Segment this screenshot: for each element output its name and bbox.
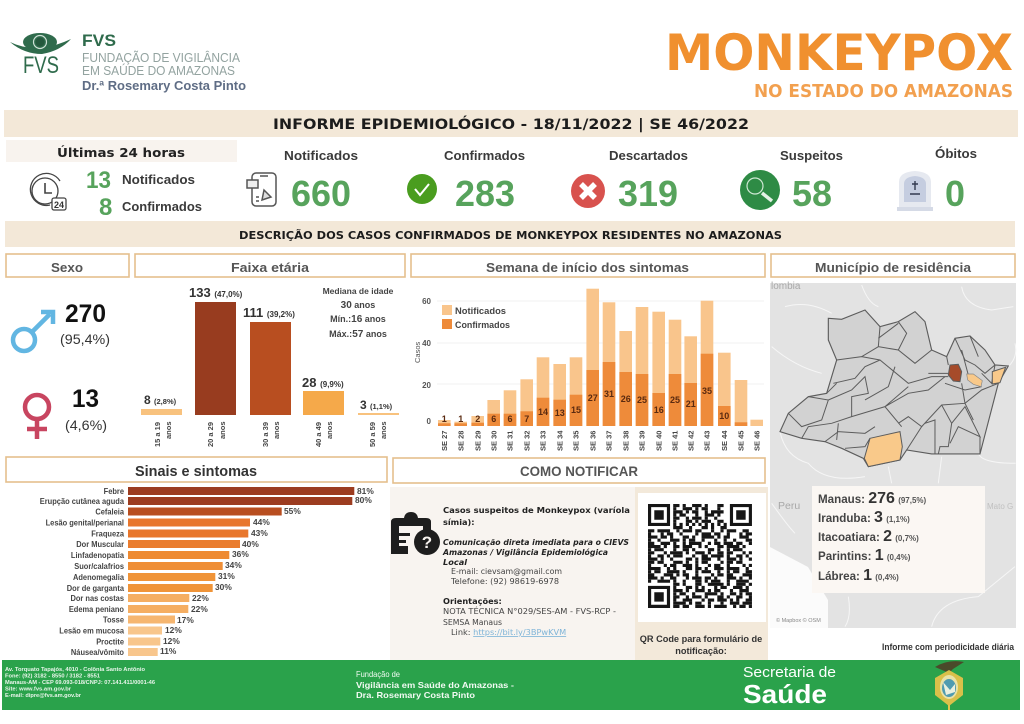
y axis: 60 bbox=[422, 297, 432, 306]
value labels: 13 bbox=[555, 408, 565, 418]
x axis labels: SE 36 bbox=[588, 431, 597, 451]
heading band: informe bbox=[4, 110, 1018, 137]
value labels: 25 bbox=[637, 395, 647, 405]
caption: QR: notificação: bbox=[675, 646, 727, 656]
panel header: faixa etária bbox=[135, 254, 405, 277]
text block: mediana de idade: Máx.:57 anos bbox=[329, 329, 387, 340]
footer: address bbox=[5, 667, 155, 699]
value labels: 15 bbox=[571, 405, 581, 415]
symptom values: 31% bbox=[218, 571, 235, 581]
icon: tombstone bbox=[897, 171, 933, 211]
text: casos suspeitos: Local bbox=[443, 557, 467, 567]
symptom values: 30% bbox=[215, 582, 232, 592]
symptom labels bbox=[40, 487, 125, 657]
x axis labels: SE 30 bbox=[489, 431, 498, 451]
panel: últimas 24 horas bbox=[6, 140, 237, 221]
text: casos suspeitos: Orientações: bbox=[443, 596, 502, 606]
legend: Confirmados bbox=[455, 320, 510, 331]
icon: clipboard with question bbox=[391, 512, 440, 555]
panel header: município: Município de residência bbox=[815, 260, 972, 275]
panel header: semana: Semana de início dos sintomas bbox=[486, 260, 689, 275]
title: NO ESTADO DO AMAZONAS bbox=[754, 81, 1013, 102]
bar chart: faixa etária: 8 (2,8%) bbox=[144, 393, 177, 407]
QR code bbox=[648, 504, 752, 608]
symptom values: 43% bbox=[251, 528, 268, 538]
value labels bbox=[442, 386, 729, 424]
value labels: 2 bbox=[475, 414, 480, 424]
bar chart: faixa etária: 40 a 49 bbox=[314, 422, 323, 447]
callout: municípios: Lábrea: 1 (0,4%) bbox=[818, 567, 899, 584]
bar chart: faixa etária: 50 a 59 bbox=[368, 422, 377, 447]
kpi: suspeitos bbox=[740, 149, 843, 214]
footer: secretaria de saúde bbox=[743, 664, 836, 709]
kpi: notificados: Notificados bbox=[284, 149, 358, 163]
value labels: 16 bbox=[654, 405, 664, 415]
callout: municípios: Parintins: 1 (0,4%) bbox=[818, 547, 911, 564]
x axis labels: SE 33 bbox=[539, 431, 548, 451]
x axis labels: SE 35 bbox=[572, 431, 581, 451]
y axis bbox=[413, 297, 432, 426]
panel: como notificar bbox=[390, 487, 635, 660]
panel: sexo: (4,6%) bbox=[65, 417, 107, 433]
value labels: 14 bbox=[538, 407, 548, 417]
x axis labels: SE 32 bbox=[522, 431, 531, 451]
value labels: 7 bbox=[524, 414, 529, 424]
bar chart: faixa etária: anos bbox=[272, 421, 281, 439]
value labels: 21 bbox=[686, 399, 696, 409]
text: casos suspeitos: Amazonas / Vigilância Epidemiológica bbox=[442, 547, 608, 557]
legend bbox=[442, 305, 510, 331]
text block: mediana de idade: Mín.:16 anos bbox=[330, 314, 386, 325]
symptom values: 11% bbox=[160, 646, 177, 656]
symptom labels: Erupção cutânea aguda bbox=[40, 497, 125, 506]
x axis labels: SE 28 bbox=[456, 431, 465, 451]
x axis labels: SE 46 bbox=[752, 431, 761, 451]
kpi: suspeitos: 58 bbox=[792, 173, 832, 214]
footer: fundação: Vigilância em Saúde do Amazonas - bbox=[356, 680, 514, 690]
kpi: óbitos: Óbitos bbox=[935, 146, 977, 161]
caption: QR bbox=[640, 634, 762, 656]
footer: address: E-mail: dipre@fvs.am.gov.br bbox=[5, 693, 82, 699]
icon: female bbox=[25, 395, 49, 439]
map labels: © Mapbox © OSM bbox=[776, 617, 821, 624]
kpi: confirmados bbox=[407, 149, 525, 214]
chart: semana de início dos sintomas bbox=[413, 289, 764, 451]
value labels: 6 bbox=[507, 414, 513, 424]
panel header: município bbox=[771, 254, 1015, 277]
panel: sexo: (95,4%) bbox=[60, 331, 110, 347]
kpi: notificados: 660 bbox=[291, 173, 351, 214]
logo: FVS: FVS bbox=[82, 31, 116, 50]
value labels: 10 bbox=[719, 411, 729, 421]
kpi: confirmados: 283 bbox=[455, 173, 515, 214]
x axis labels: SE 29 bbox=[473, 431, 482, 451]
symptom labels: Dor nas costas bbox=[70, 594, 125, 603]
text: casos suspeitos: E-mail: cievsam@gmail.com bbox=[451, 566, 562, 576]
text: casos suspeitos: Link: https://bit.ly/3BPwKVM bbox=[451, 627, 566, 637]
map labels: lombia bbox=[771, 281, 801, 292]
icon: cross bbox=[571, 174, 605, 208]
symptom labels: Cefaleia bbox=[95, 507, 125, 517]
symptom labels: Náusea/vômito bbox=[71, 648, 124, 657]
symptom values: 12% bbox=[163, 636, 180, 646]
kpi: descartados: Descartados bbox=[609, 149, 688, 163]
x axis labels: SE 44 bbox=[720, 430, 729, 451]
panel: últimas 24 horas: 13 bbox=[86, 167, 111, 194]
text block: mediana de idade bbox=[323, 286, 394, 340]
symptom labels: Adenomegalia bbox=[73, 573, 125, 582]
panel header: como notificar bbox=[393, 458, 765, 483]
kpi: suspeitos: Suspeitos bbox=[780, 149, 843, 163]
x axis labels: SE 38 bbox=[621, 431, 630, 451]
panel header: sexo: Sexo bbox=[51, 260, 83, 275]
bar chart: faixa etária: 3 (1,1%) bbox=[360, 398, 393, 412]
symptom values bbox=[160, 486, 374, 656]
value labels: 1 bbox=[442, 414, 447, 424]
bars: notificados bbox=[438, 289, 763, 426]
bar chart: faixa etária bbox=[141, 285, 399, 447]
callout: municípios bbox=[812, 486, 985, 593]
state of Amazonas bbox=[780, 310, 1008, 467]
bar chart: faixa etária: anos bbox=[379, 421, 388, 439]
y axis: 20 bbox=[422, 381, 432, 390]
value labels: 27 bbox=[588, 393, 598, 403]
panel header: sinais e sintomas bbox=[6, 457, 387, 482]
bar chart: faixa etária: 20 a 29 bbox=[206, 422, 215, 447]
symptom labels: Dor Muscular bbox=[76, 540, 124, 549]
background rivers bbox=[772, 285, 1016, 627]
bar chart: faixa etária: 28 (9,9%) bbox=[302, 375, 344, 390]
bar chart: faixa etária: 30 a 39 bbox=[261, 422, 270, 447]
heading band: informe: INFORME EPIDEMIOLÓGICO - 18/11/2022 | SE 46/2022 bbox=[273, 115, 749, 133]
panel header: semana bbox=[411, 254, 765, 277]
kpi: confirmados: Confirmados bbox=[444, 149, 525, 163]
value labels: 25 bbox=[670, 395, 680, 405]
map labels: Mato G bbox=[987, 502, 1013, 511]
symptom labels: Linfadenopatia bbox=[71, 551, 125, 560]
bar chart: faixa etária: 111 (39,2%) bbox=[243, 305, 295, 320]
x axis labels: SE 40 bbox=[654, 431, 663, 451]
footer: fundação: Dra. Rosemary Costa Pinto bbox=[356, 690, 475, 700]
footer: fundação: Fundação de bbox=[356, 669, 400, 679]
symptom values: 22% bbox=[191, 604, 208, 614]
logo: FVS: FVS bbox=[23, 52, 59, 79]
logo: FVS: Dr.ª Rosemary Costa Pinto bbox=[82, 79, 246, 93]
legend: Notificados bbox=[455, 306, 506, 317]
text: casos suspeitos: Casos suspeitos de Monkeypox (varíola bbox=[443, 505, 630, 515]
symptom values: 36% bbox=[232, 549, 249, 559]
value labels: 26 bbox=[621, 394, 631, 404]
map: município de residência bbox=[770, 281, 1016, 628]
symptom values: 22% bbox=[192, 593, 209, 603]
value labels: 35 bbox=[702, 386, 712, 396]
symptom values: 17% bbox=[177, 615, 194, 625]
symptom values: 34% bbox=[225, 560, 242, 570]
value labels: 1 bbox=[458, 414, 463, 424]
symptom values: 12% bbox=[165, 625, 182, 635]
panel: QR code bbox=[635, 487, 768, 660]
icon: clipboard with question: ? bbox=[422, 533, 432, 552]
y axis: 40 bbox=[422, 339, 432, 348]
kpi: óbitos bbox=[897, 146, 977, 214]
heading band: descrição: DESCRIÇÃO DOS CASOS CONFIRMADOS DE MONKEYPOX RESIDENTES NO AMAZONAS bbox=[239, 229, 782, 242]
municipal borders bbox=[788, 322, 998, 454]
text: casos suspeitos bbox=[442, 505, 630, 637]
icon: clock 24h: 24 bbox=[54, 200, 64, 210]
bar chart: sinais e sintomas bbox=[40, 486, 374, 657]
y axis: 0 bbox=[427, 417, 432, 426]
icon: male bbox=[13, 312, 53, 351]
text block: mediana de idade: Mediana de idade bbox=[323, 286, 394, 296]
symptom labels: Suor/calafrios bbox=[74, 562, 125, 571]
icon: check bbox=[407, 174, 437, 204]
panel: sexo: 13 bbox=[72, 385, 99, 413]
kpi: notificados bbox=[247, 149, 358, 214]
panel: últimas 24 horas: Últimas 24 horas bbox=[57, 145, 185, 160]
panel header: sexo bbox=[6, 254, 129, 277]
symptom values: 81% bbox=[357, 486, 374, 496]
highlighted municipalities bbox=[864, 432, 902, 467]
footer: secretaria de saúde: Secretaria de bbox=[743, 664, 836, 681]
heading band: descrição bbox=[5, 221, 1015, 247]
panel header: faixa etária: Faixa etária bbox=[231, 260, 310, 275]
logo: FVS: FUNDAÇÃO DE VIGILÂNCIA bbox=[82, 50, 241, 65]
x axis labels bbox=[440, 430, 761, 451]
footer: address: Site: www.fvs.am.gov.br bbox=[5, 686, 72, 692]
symptom labels: Febre bbox=[104, 487, 125, 496]
bar chart: faixa etária: anos bbox=[325, 421, 334, 439]
symptom labels: Lesão genital/perianal bbox=[46, 518, 124, 528]
bar chart: faixa etária: 133 (47,0%) bbox=[189, 285, 243, 300]
footer: fundação bbox=[356, 669, 514, 700]
text block: mediana de idade: 30 anos bbox=[341, 300, 375, 311]
note: periodicidade: Informe com periodicidade diária bbox=[882, 642, 1015, 652]
x axis labels: SE 45 bbox=[737, 431, 746, 451]
x axis labels: SE 42 bbox=[686, 431, 695, 451]
symptom labels: Edema peniano bbox=[69, 605, 124, 614]
x axis labels: SE 34 bbox=[555, 430, 564, 451]
symptom labels: Tosse bbox=[103, 615, 125, 625]
symptom values: 55% bbox=[284, 506, 301, 516]
footer: address: Av. Torquato Tapajós, 4010 - Colônia Santo Antônio bbox=[5, 667, 146, 673]
icon: clock 24h bbox=[30, 173, 66, 210]
kpi: descartados bbox=[571, 149, 688, 214]
value labels: 6 bbox=[491, 414, 496, 424]
panel: sexo bbox=[13, 300, 110, 439]
footer bbox=[2, 660, 1020, 710]
panel: sexo: 270 bbox=[65, 300, 106, 328]
map labels: Peru bbox=[778, 500, 800, 512]
kpi: descartados: 319 bbox=[618, 173, 678, 214]
panel header: como notificar: COMO NOTIFICAR bbox=[520, 463, 638, 479]
kpi: óbitos: 0 bbox=[945, 173, 965, 214]
panel: últimas 24 horas: Confirmados bbox=[122, 200, 202, 214]
text: casos suspeitos: SEMSA Manaus bbox=[443, 617, 502, 627]
callout: municípios: Itacoatiara: 2 (0,7%) bbox=[818, 528, 919, 545]
x axis labels: SE 43 bbox=[703, 431, 712, 451]
text: casos suspeitos: Telefone: (92) 98619-6978 bbox=[450, 576, 559, 586]
icon: magnifier bbox=[740, 170, 780, 210]
text: casos suspeitos: Comunicação direta imediata para o CIEVS bbox=[443, 537, 629, 547]
symptom labels: Dor de garganta bbox=[67, 584, 125, 593]
text: casos suspeitos: NOTA TÉCNICA N°029/SES-AM - FVS-RCP - bbox=[443, 605, 616, 616]
title: MONKEYPOX bbox=[665, 24, 1013, 82]
y axis: Casos bbox=[413, 341, 422, 363]
map labels bbox=[771, 281, 1013, 624]
footer: secretaria de saúde: Saúde bbox=[743, 679, 827, 709]
panel: últimas 24 horas: 8 bbox=[99, 194, 112, 221]
icon: coat of arms bbox=[935, 661, 964, 710]
logo: FVS: EM SAÚDE DO AMAZONAS bbox=[82, 63, 235, 78]
bar chart: faixa etária: 15 a 19 bbox=[153, 422, 162, 447]
bar chart: faixa etária: anos bbox=[218, 421, 227, 439]
symptom labels: Fraqueza bbox=[91, 529, 125, 539]
footer: address: Manaus-AM - CEP 69.093-018/CNPJ: 07.141.411/0001-46 bbox=[5, 680, 155, 686]
symptom values: 40% bbox=[242, 539, 259, 549]
logo: FVS bbox=[10, 31, 246, 93]
symptom values: 44% bbox=[253, 517, 270, 527]
panel header: sinais e sintomas: Sinais e sintomas bbox=[135, 463, 257, 480]
x axis labels: SE 31 bbox=[506, 431, 515, 451]
symptom labels: Proctite bbox=[96, 637, 125, 647]
symptom values: 80% bbox=[355, 495, 372, 505]
text: casos suspeitos: símia): bbox=[443, 517, 475, 527]
icon: phone with bell bbox=[247, 173, 276, 206]
callout: municípios: Manaus: 276 (97,5%) bbox=[818, 490, 927, 507]
bar chart: faixa etária: anos bbox=[164, 421, 173, 439]
callout: municípios: Iranduba: 3 (1,1%) bbox=[818, 509, 910, 526]
x axis labels: SE 41 bbox=[671, 431, 680, 451]
bars: confirmados bbox=[438, 354, 747, 426]
footer: address: Fone: (92) 3182 - 8550 / 3182 - 8551 bbox=[5, 674, 100, 680]
finder patterns bbox=[648, 504, 752, 608]
value labels: 31 bbox=[604, 389, 614, 399]
x axis labels: SE 39 bbox=[638, 431, 647, 451]
caption: QR: QR Code para formulário de bbox=[640, 634, 762, 644]
x axis labels: SE 27 bbox=[440, 431, 449, 451]
x axis labels: SE 37 bbox=[605, 431, 614, 451]
panel: últimas 24 horas: Notificados bbox=[122, 173, 195, 187]
symptom labels: Lesão em mucosa bbox=[59, 626, 125, 636]
